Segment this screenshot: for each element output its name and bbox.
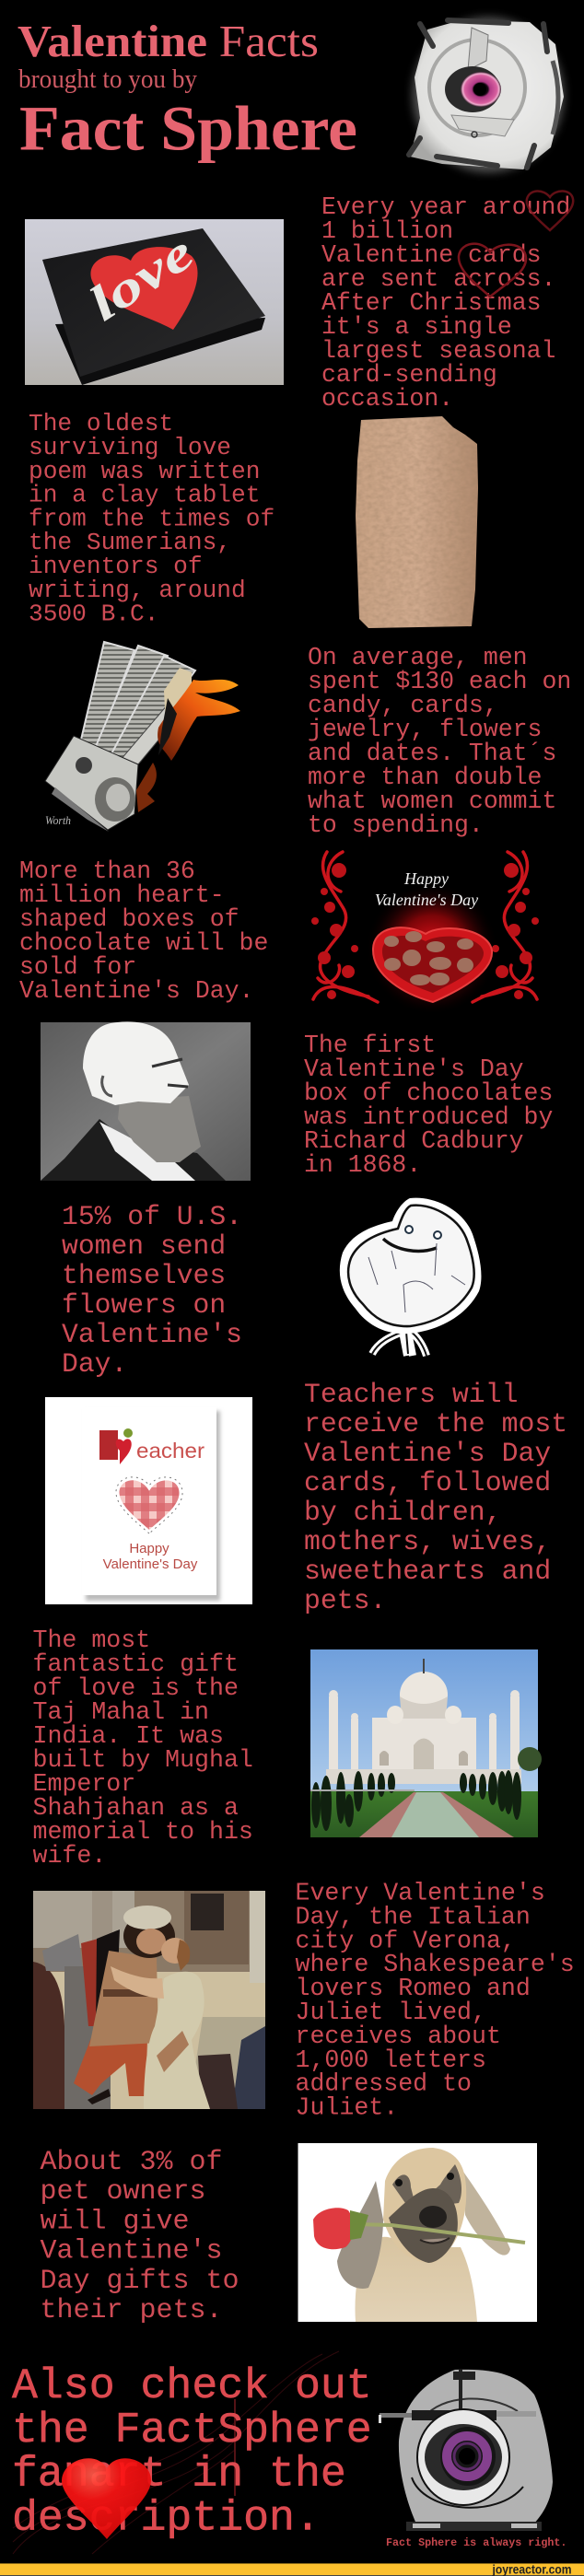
image: heart shaped chocolate box bbox=[311, 852, 539, 1015]
doublet bbox=[89, 1951, 158, 2046]
head bbox=[383, 2148, 466, 2263]
fact text: teachers: receive the most bbox=[304, 1408, 567, 1440]
fact text: Taj Mahal: wife. bbox=[33, 1842, 106, 1870]
fact text: Cadbury box: was introduced by bbox=[304, 1103, 553, 1131]
fact text: Verona: receives about bbox=[295, 2022, 501, 2050]
beard bbox=[118, 1096, 201, 1162]
fact text: valentine cards: it's a single bbox=[321, 313, 512, 341]
fact text: oldest love poem: surviving love bbox=[29, 434, 231, 461]
caption: Fact Sphere is always right: Fact Sphere is always right. bbox=[386, 2536, 566, 2549]
lower right bbox=[189, 2017, 265, 2109]
fact text: teachers: pets. bbox=[304, 1585, 386, 1616]
fact text: Cadbury box: Richard Cadbury bbox=[304, 1127, 524, 1155]
closing message: fanart in the bbox=[12, 2450, 346, 2498]
plinth bbox=[326, 1769, 521, 1784]
fact text: chocolate boxes: shaped boxes of bbox=[19, 905, 239, 933]
fact text: women send flowers: Valentine's bbox=[62, 1319, 242, 1350]
fact text: teachers: Valentine's Day bbox=[304, 1438, 551, 1469]
fact text: Verona: Juliet lived, bbox=[295, 1999, 486, 2026]
image: clay tablet bbox=[356, 416, 478, 628]
fact text: Verona: 1,000 letters bbox=[295, 2046, 486, 2074]
image: Richard Cadbury portrait bbox=[41, 1021, 251, 1181]
tomb bbox=[372, 1718, 476, 1771]
fact text: valentine cards: After Christmas bbox=[321, 289, 542, 317]
floral swirls bbox=[313, 852, 537, 1002]
fact text: spending: spent $130 each on bbox=[308, 668, 571, 695]
fact text: valentine cards: are sent across. bbox=[321, 265, 555, 293]
fact text: pets: About 3% of bbox=[41, 2147, 223, 2178]
fact text: Verona: lovers Romeo and bbox=[295, 1975, 531, 2002]
fact text: Cadbury box: Valentine's Day bbox=[304, 1055, 524, 1083]
closing message: the FactSphere bbox=[12, 2406, 372, 2454]
minarets bbox=[329, 1690, 520, 1772]
fact text: valentine cards: largest seasonal bbox=[321, 337, 555, 365]
fact text: valentine cards: card-sending bbox=[321, 361, 497, 389]
legs bbox=[74, 2035, 147, 2096]
image: Romeo and Juliet painting bbox=[33, 1891, 265, 2109]
card lower flap bbox=[55, 318, 265, 385]
decorative swirl behind closing message bbox=[13, 2351, 339, 2554]
fact text: oldest love poem: from the times of bbox=[29, 505, 274, 532]
icon: large red heart bbox=[62, 2458, 151, 2539]
fact text: pets: Day gifts to bbox=[41, 2266, 239, 2297]
image: burning money bbox=[45, 642, 240, 832]
red heart bbox=[90, 247, 198, 330]
fact text: women send flowers: Day. bbox=[62, 1348, 127, 1380]
fact text: oldest love poem: in a clay tablet bbox=[29, 482, 260, 509]
card front bbox=[42, 228, 265, 377]
body bbox=[355, 2237, 477, 2322]
fact text: pets: will give bbox=[41, 2206, 190, 2237]
fact text: pets: their pets. bbox=[41, 2295, 223, 2326]
fact text: Verona: addressed to bbox=[295, 2070, 472, 2098]
fact text: Taj Mahal: Shahjahan as a bbox=[33, 1794, 239, 1822]
fact text: Taj Mahal: memorial to his bbox=[33, 1818, 253, 1846]
top bar bbox=[380, 2413, 412, 2418]
dress and arm bbox=[144, 1972, 210, 2109]
fact text: Cadbury box: box of chocolates bbox=[304, 1079, 553, 1107]
eye housing bbox=[417, 2409, 509, 2505]
fact text: teachers: cards, followed bbox=[304, 1467, 551, 1498]
fact text: chocolate boxes: More than 36 bbox=[19, 857, 195, 885]
heads bbox=[123, 1914, 175, 1958]
rose bbox=[313, 2208, 354, 2249]
fact text: oldest love poem: the Sumerians, bbox=[29, 529, 231, 556]
collar bbox=[99, 1122, 195, 1181]
fact text: oldest love poem: writing, around bbox=[29, 577, 246, 604]
fact text: Cadbury box: The first bbox=[304, 1032, 436, 1059]
heading: Fact Sphere: Fact Sphere bbox=[19, 94, 357, 164]
fact text: women send flowers: flowers on bbox=[62, 1289, 226, 1321]
heading: Valentine Facts: Valentine Facts bbox=[18, 16, 319, 66]
icon: Wheatley-like Fact Sphere core bbox=[409, 17, 564, 172]
fact text: Cadbury box: in 1868. bbox=[304, 1151, 421, 1179]
lawns bbox=[310, 1791, 538, 1837]
fact text: teachers: sweethearts and bbox=[304, 1556, 551, 1587]
plaid heart bbox=[118, 1479, 181, 1532]
fact text: spending: more than double bbox=[308, 763, 542, 791]
closing message: Also check out bbox=[12, 2361, 372, 2410]
closing message: description. bbox=[12, 2494, 321, 2542]
fact text: Taj Mahal: built by Mughal bbox=[33, 1746, 253, 1774]
fact text: teachers: by children, bbox=[304, 1497, 502, 1528]
image: teacher valentine card bbox=[45, 1397, 252, 1604]
fact text: spending: On average, men bbox=[308, 644, 528, 671]
ears bbox=[337, 2181, 383, 2289]
fact text: valentine cards: occasion. bbox=[321, 385, 453, 413]
fact text: valentine cards: Every year around bbox=[321, 193, 570, 221]
fact text: oldest love poem: poem was written bbox=[29, 458, 260, 485]
fact text: spending: candy, cards, bbox=[308, 692, 498, 719]
footer bar bbox=[0, 2562, 584, 2576]
image: love card bbox=[25, 219, 284, 385]
icon: outline hearts over text bbox=[459, 191, 573, 297]
fact text: Taj Mahal: Emperor bbox=[33, 1770, 135, 1798]
icon: Fact Sphere fan art bbox=[379, 2370, 553, 2531]
greeting: Happy bbox=[129, 1541, 169, 1556]
fact text: Verona: city of Verona, bbox=[295, 1927, 516, 1954]
fact text: Verona: where Shakespeare's bbox=[295, 1951, 575, 1978]
base bbox=[406, 2522, 542, 2531]
left dark mass bbox=[33, 1962, 64, 2109]
subheading: brought to you by: brought to you by bbox=[18, 65, 197, 94]
image: dog with rose bbox=[298, 2143, 537, 2322]
fact text: women send flowers: women send bbox=[62, 1230, 226, 1262]
fact text: women send flowers: themselves bbox=[62, 1260, 226, 1291]
greeting: Valentine's Day bbox=[375, 891, 478, 909]
fact text: oldest love poem: inventors of bbox=[29, 553, 203, 580]
fact text: Verona: Juliet. bbox=[295, 2094, 398, 2122]
fact text: pets: pet owners bbox=[41, 2176, 206, 2208]
fact text: chocolate boxes: million heart- bbox=[19, 881, 225, 909]
fact text: teachers: Teachers will bbox=[304, 1379, 518, 1410]
greeting: Happy bbox=[403, 869, 449, 888]
fact text: spending: what women commit bbox=[308, 787, 556, 815]
title bbox=[18, 16, 357, 164]
suit bbox=[41, 1119, 226, 1181]
image: teacher valentine card: eacher bbox=[136, 1439, 204, 1463]
stem bbox=[355, 2224, 525, 2243]
fact text: chocolate boxes: Valentine's Day. bbox=[19, 977, 253, 1005]
red cloak bbox=[81, 1934, 115, 2026]
love lettering: love bbox=[79, 224, 204, 332]
fact text: valentine cards: 1 billion bbox=[321, 217, 453, 245]
head bbox=[83, 1021, 189, 1105]
fact text: chocolate boxes: chocolate will be bbox=[19, 929, 268, 957]
fact text: Verona: Day, the Italian bbox=[295, 1903, 531, 1930]
watermark: Worth bbox=[45, 813, 71, 827]
icon: forever alone meme face bbox=[340, 1198, 481, 1356]
upper wall bbox=[33, 1891, 265, 1972]
walkways and reflecting pool bbox=[359, 1792, 514, 1837]
fact text: oldest love poem: 3500 B.C. bbox=[29, 600, 158, 628]
flames bbox=[158, 680, 240, 761]
box bbox=[373, 927, 492, 1002]
front bills bbox=[45, 736, 138, 830]
fact text: teachers: mothers, wives, bbox=[304, 1526, 551, 1557]
fact text: spending: to spending. bbox=[308, 811, 484, 839]
fact text: pets: Valentine's bbox=[41, 2236, 223, 2267]
fact text: Verona: Every Valentine's bbox=[295, 1879, 545, 1906]
fact text: Taj Mahal: fantastic gift bbox=[33, 1650, 239, 1678]
fact text: Taj Mahal: Taj Mahal in bbox=[33, 1698, 209, 1726]
fact text: spending: and dates. That´s bbox=[308, 740, 556, 767]
image: Taj Mahal bbox=[310, 1649, 542, 1837]
teacher label bbox=[99, 1430, 118, 1460]
fact text: chocolate boxes: sold for bbox=[19, 953, 136, 981]
fact text: valentine cards: Valentine cards bbox=[321, 241, 542, 269]
fact text: oldest love poem: The oldest bbox=[29, 410, 173, 437]
fact text: Taj Mahal: The most bbox=[33, 1626, 150, 1654]
fact text: spending: jewelry, flowers bbox=[308, 716, 542, 743]
fact text: Taj Mahal: India. It was bbox=[33, 1722, 224, 1750]
fact text: women send flowers: 15% of U.S. bbox=[62, 1201, 242, 1232]
fact text: Taj Mahal: of love is the bbox=[33, 1674, 239, 1702]
cypress trees bbox=[311, 1770, 521, 1831]
greeting: Valentine's Day bbox=[103, 1556, 198, 1572]
